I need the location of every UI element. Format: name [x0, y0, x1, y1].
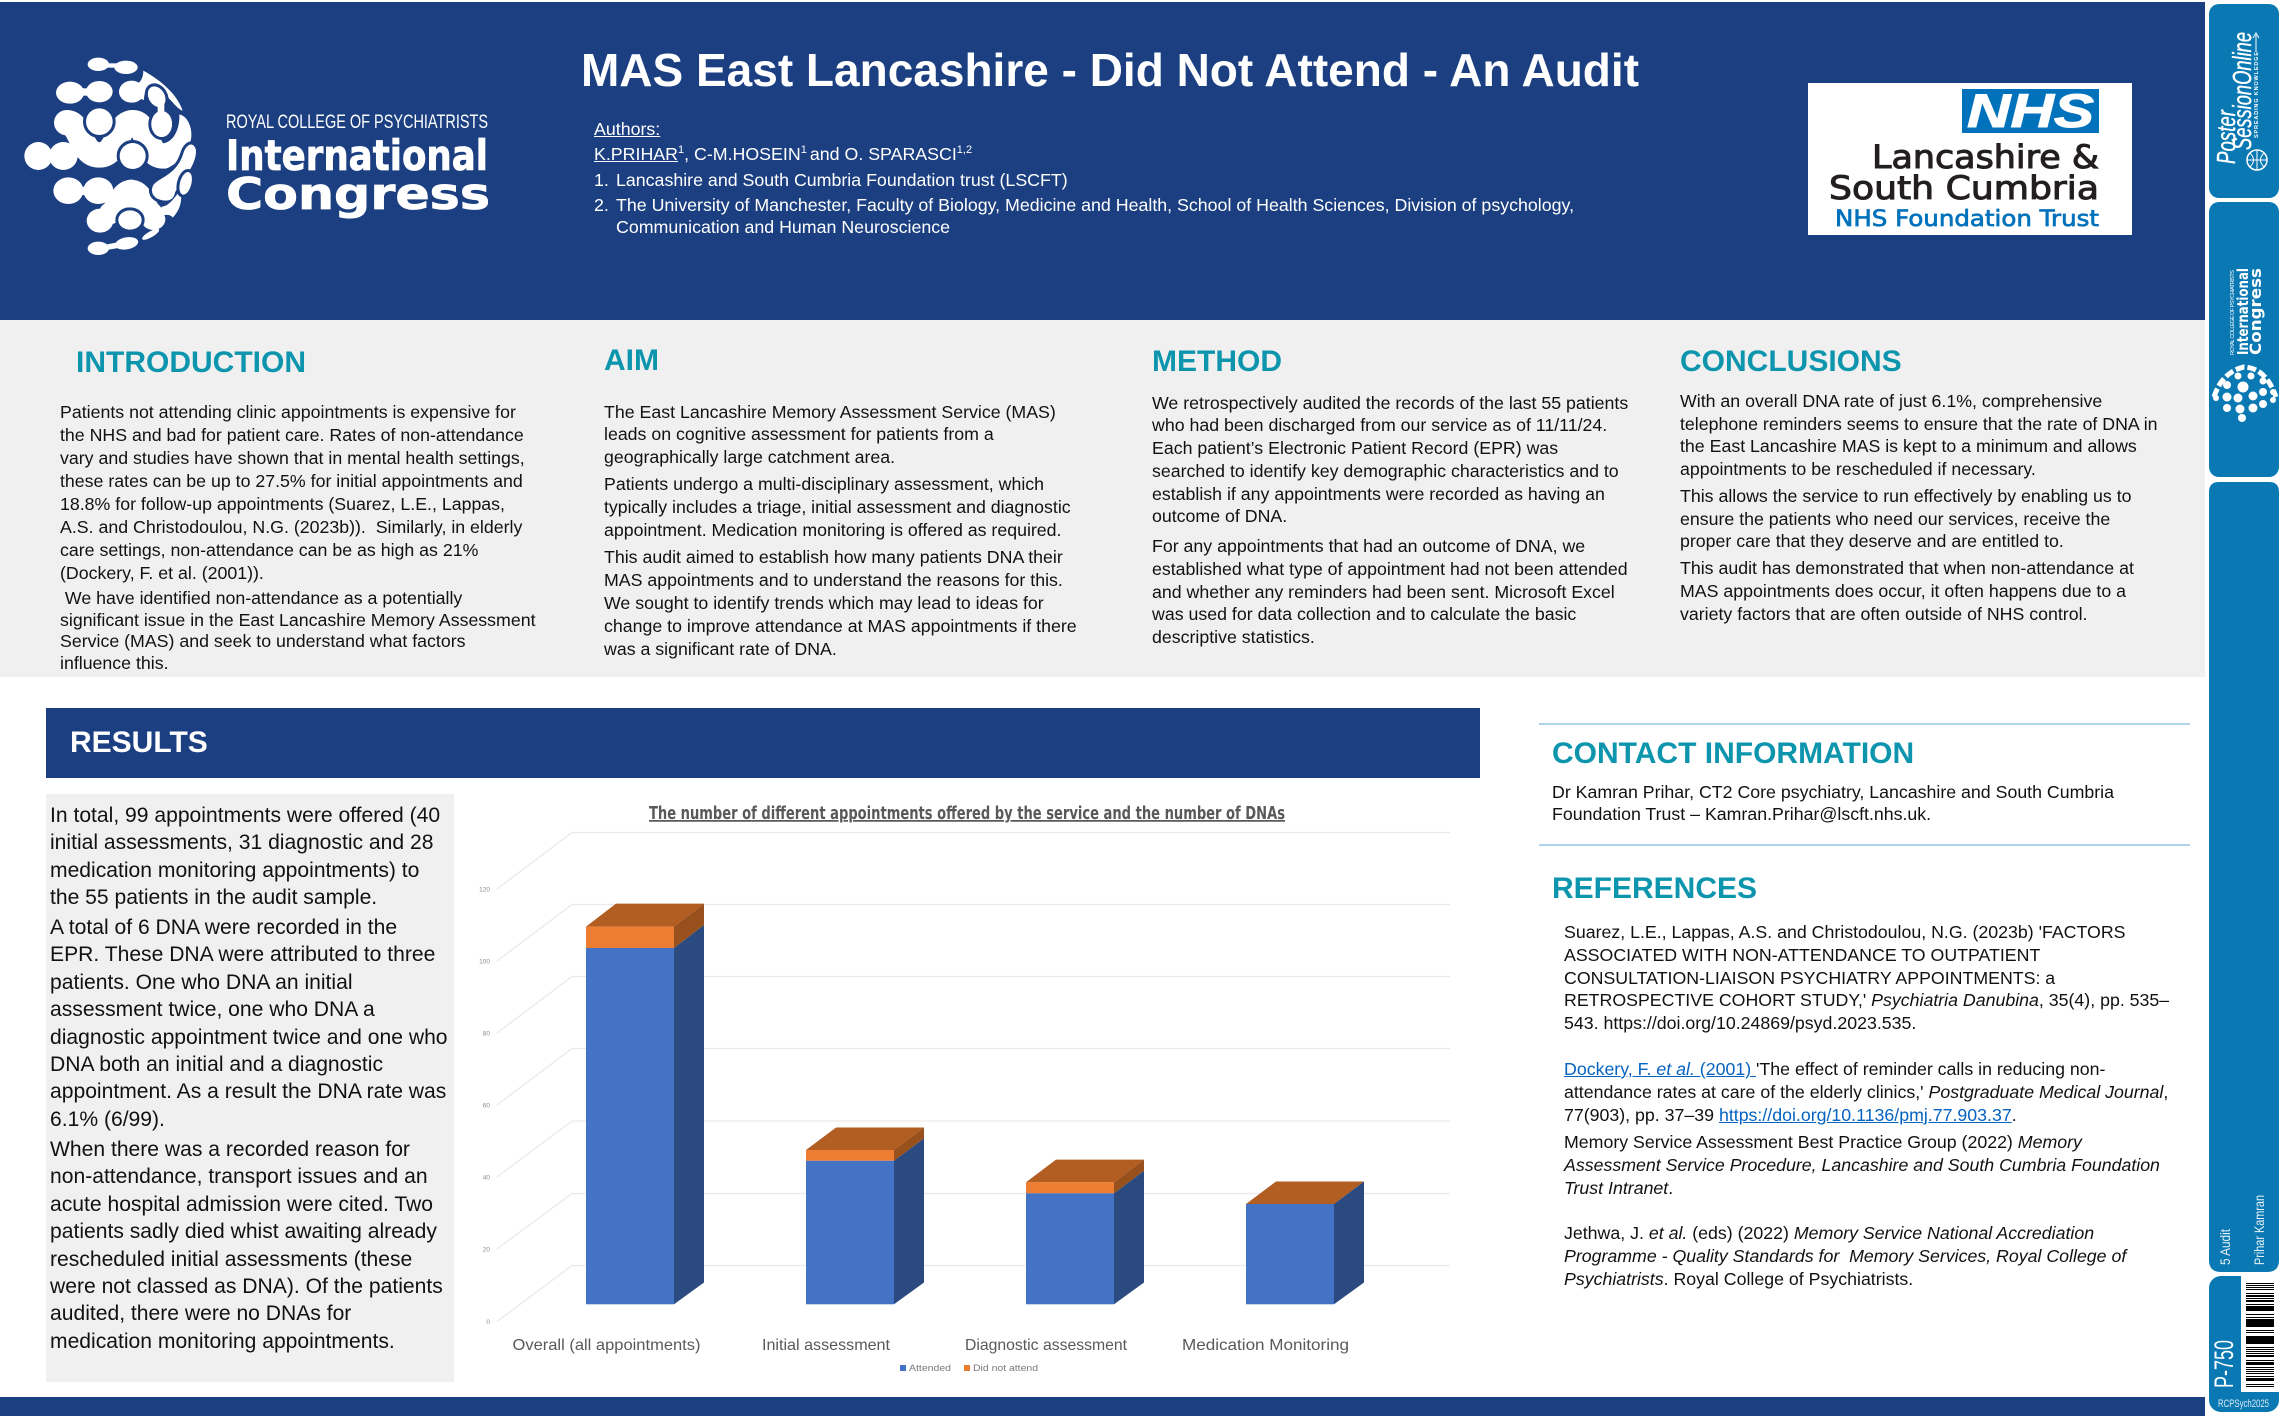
method paragraph 1: We retrospectively audited the records of the last 55 patients — [1152, 392, 1628, 412]
panel: aim — [604, 344, 1077, 659]
aim paragraph 3: We sought to identify trends which may lead to ideas for — [604, 593, 1044, 613]
reference: Jethwa — [1564, 1223, 2128, 1289]
author names: K.PRIHAR1, C-M.HOSEIN1 and O. SPARASCI1,2 — [594, 144, 972, 164]
method paragraph 2: and whether any reminders had been sent. Microsoft Excel — [1152, 582, 1615, 602]
method paragraph 1: outcome of DNA. — [1152, 506, 1287, 526]
sidebar tab: poster number and barcode: P-750 — [2209, 1340, 2239, 1388]
reference: Suarez: Suarez, L.E., Lappas, A.S. and Christodoulou, N.G. (2023b) 'FACTORS — [1564, 922, 2126, 942]
sidebar tab: poster details: 5 Audit — [2217, 1229, 2233, 1265]
grey band: introductory sections — [0, 320, 2205, 677]
results paragraph 2: 6.1% (6/99). — [50, 1108, 165, 1131]
conclusions paragraph 2: This allows the service to run effectively by enabling us to — [1680, 486, 2132, 506]
sidebar tab: International Congress — [2209, 202, 2279, 477]
category labels: Initial assessment — [762, 1337, 891, 1354]
aim paragraph 3: This audit aimed to establish how many patients DNA their — [604, 547, 1063, 567]
logo: Royal College of Psychiatrists International Congress: Congress — [226, 169, 490, 220]
reference: Memory Service Assessment: Memory Service Assessment Best Practice Group (2022) Memory — [1564, 1132, 2082, 1152]
conclusions paragraph 1 — [1680, 391, 2158, 479]
category labels: Diagnostic assessment — [965, 1337, 1128, 1354]
method paragraph 2: For any appointments that had an outcome of DNA, we — [1152, 536, 1585, 556]
contact details: Foundation Trust – Kamran.Prihar@lscft.nhs.uk. — [1552, 804, 1931, 824]
legend: Attended — [909, 1363, 951, 1374]
aim paragraph 2: appointment. Medication monitoring is offered as required. — [604, 520, 1062, 540]
results paragraph 2: appointment. As a result the DNA rate was — [50, 1080, 446, 1103]
y axis labels: 60 — [483, 1102, 490, 1110]
results paragraph 2 — [50, 916, 448, 1131]
results paragraph 1: the 55 patients in the audit sample. — [50, 886, 377, 909]
title: MAS East Lancashire - Did Not Attend - An Audit — [581, 44, 1639, 96]
bar: medication monitoring — [1246, 1182, 1364, 1304]
reference: Suarez: 543. https://doi.org/10.24869/psyd.2023.535. — [1564, 1013, 1916, 1033]
method paragraph 1: Each patient’s Electronic Patient Record (EPR) was — [1152, 438, 1558, 458]
conclusions paragraph 1: telephone reminders seems to ensure that the rate of DNA in — [1680, 414, 2158, 434]
introduction paragraph 1: Patients not attending clinic appointments is expensive for — [60, 402, 516, 422]
reference: Suarez: CONSULTATION-LIAISON PSYCHIATRY APPOINTMENTS: a — [1564, 968, 2055, 988]
introduction paragraph 2: significant issue in the East Lancashire Memory Assessment — [60, 610, 536, 630]
affiliation 1: Lancashire and South Cumbria Foundation trust (LSCFT) — [616, 170, 1068, 190]
heading: contact information: CONTACT INFORMATION — [1552, 737, 1914, 770]
aim paragraph 1: geographically large catchment area. — [604, 447, 895, 467]
sidebar tab: poster number and barcode — [2209, 1276, 2279, 1412]
results paragraph 3: When there was a recorded reason for — [50, 1138, 410, 1161]
reference: Suarez: RETROSPECTIVE COHORT STUDY,' Psychiatria Danubina, 35(4), pp. 535– — [1564, 990, 2169, 1010]
contact details: Dr Kamran Prihar, CT2 Core psychiatry, Lancashire and South Cumbria — [1552, 782, 2114, 802]
reference: Jethwa: Psychiatrists. Royal College of Psychiatrists. — [1564, 1269, 1913, 1289]
reference: Dockery — [1564, 1059, 2168, 1125]
conclusions paragraph 2: ensure the patients who need our services, receive the — [1680, 509, 2110, 529]
panel: references — [1552, 872, 2170, 1289]
aim paragraph 1 — [604, 402, 1056, 467]
method paragraph 2 — [1152, 536, 1628, 647]
heading: introduction: INTRODUCTION — [76, 346, 306, 379]
affiliation 1: 1. — [594, 170, 609, 190]
sidebar tab: poster details: Prihar Kamran — [2251, 1195, 2267, 1265]
conclusions paragraph 3: This audit has demonstrated that when non-attendance at — [1680, 558, 2134, 578]
bar: diagnostic assessment — [1026, 1160, 1144, 1304]
conclusions paragraph 2: proper care that they deserve and are entitled to. — [1680, 531, 2064, 551]
affiliation 2: The University of Manchester, Faculty of Biology, Medicine and Health, School of Health Sciences, Division of psychology, — [616, 195, 1574, 215]
y axis labels — [479, 886, 490, 1326]
panel: contact information — [1539, 723, 2190, 846]
aim paragraph 3 — [604, 547, 1077, 659]
results paragraph 1: In total, 99 appointments were offered (40 — [50, 804, 440, 827]
introduction paragraph 1: the NHS and bad for patient care. Rates of non-attendance — [60, 424, 524, 444]
reference: Memory Service Assessment: Assessment Service Procedure, Lancashire and South Cumbria Foundation — [1564, 1155, 2160, 1175]
aim paragraph 2: typically includes a triage, initial assessment and diagnostic — [604, 497, 1071, 517]
heading: aim: AIM — [604, 344, 659, 377]
aim paragraph 3: was a significant rate of DNA. — [604, 639, 837, 659]
results paragraph 3: were not classed as DNA). Of the patients — [50, 1275, 443, 1298]
introduction paragraph 1: 18.8% for follow-up appointments (Suarez, L.E., Lappas, — [60, 494, 505, 514]
method paragraph 2: descriptive statistics. — [1152, 627, 1315, 647]
bar: initial assessment — [806, 1128, 924, 1304]
NHS logo: South Cumbria — [1829, 169, 2099, 207]
results heading bar: RESULTS — [70, 726, 208, 759]
heading: references: REFERENCES — [1552, 872, 1757, 905]
sidebar tab: International Congress: Congress — [2246, 268, 2265, 355]
introduction paragraph 1: these rates can be up to 27.5% for initial appointments and — [60, 470, 523, 490]
sidebar tab: International Congress: ROYAL COLLEGE OF PSYCHIATRISTS — [2230, 270, 2236, 355]
sidebar tab: poster details — [2209, 482, 2279, 1272]
reference: Dockery: attendance rates at care of the elderly clinics,' Postgraduate Medical Journal, — [1564, 1082, 2168, 1102]
reference: Jethwa: Programme - Quality Standards for Memory Services, Royal College of — [1564, 1246, 2126, 1266]
y axis labels: 100 — [479, 958, 490, 966]
reference: Dockery: 77(903), pp. 37–39 https://doi.org/10.1136/pmj.77.903.37. — [1564, 1105, 2017, 1125]
y axis labels: 0 — [486, 1319, 490, 1326]
reference: Jethwa: Jethwa, J. et al. (eds) (2022) Memory Service National Accrediation — [1564, 1223, 2094, 1243]
method paragraph 1: searched to identify key demographic characteristics and to — [1152, 461, 1619, 481]
legend: Did not attend — [973, 1363, 1038, 1374]
results paragraph 2: DNA both an initial and a diagnostic — [50, 1053, 383, 1076]
bar: overall — [586, 904, 704, 1304]
NHS logo — [1808, 83, 2132, 235]
method paragraph 1: establish if any appointments were recorded as having an — [1152, 484, 1605, 504]
y axis labels: 80 — [483, 1030, 490, 1038]
results paragraph 3: medication monitoring appointments. — [50, 1330, 395, 1353]
NHS logo: Lancashire & — [1872, 138, 2099, 176]
results paragraph 2: EPR. These DNA were attributed to three — [50, 943, 435, 966]
method paragraph 1 — [1152, 392, 1628, 526]
affiliation 2 — [594, 195, 1574, 237]
introduction paragraph 2: We have identified non-attendance as a potentially — [65, 588, 462, 608]
heading: conclusions: CONCLUSIONS — [1680, 345, 1902, 378]
method paragraph 2: established what type of appointment had not been attended — [1152, 559, 1628, 579]
introduction paragraph 2: Service (MAS) and seek to understand what factors — [60, 631, 466, 651]
sidebar tab: Poster Session Online — [2209, 4, 2279, 198]
results paragraph 3: non-attendance, transport issues and an — [50, 1165, 428, 1188]
bottom bar — [0, 1397, 2205, 1416]
panel: conclusions — [1680, 345, 2158, 624]
results paragraph 3 — [50, 1138, 443, 1353]
results paragraph 1 — [50, 804, 440, 909]
conclusions paragraph 1: appointments to be rescheduled if necessary. — [1680, 459, 2036, 479]
results paragraph 1: initial assessments, 31 diagnostic and 28 — [50, 831, 433, 854]
y axis labels: 120 — [479, 886, 490, 894]
results heading bar — [46, 708, 1480, 778]
affiliation 2: 2. — [594, 195, 609, 215]
results paragraph 3: rescheduled initial assessments (these — [50, 1248, 412, 1271]
header banner — [0, 2, 2205, 320]
method paragraph 1: who had been discharged from our service as of 11/11/24. — [1152, 415, 1607, 435]
bar chart: appointments offered and DNAs — [479, 804, 1450, 1374]
aim paragraph 2 — [604, 474, 1071, 540]
results paragraph 3: patients sadly died whist awaiting already — [50, 1220, 437, 1243]
introduction paragraph 2: influence this. — [60, 652, 169, 672]
reference: Memory Service Assessment: Trust Intranet. — [1564, 1178, 1673, 1198]
results paragraph 2: patients. One who DNA an initial — [50, 971, 353, 994]
introduction paragraph 2 — [60, 588, 536, 672]
results paragraph 2: assessment twice, one who DNA a — [50, 998, 375, 1021]
aim paragraph 3: change to improve attendance at MAS appointments if there — [604, 616, 1077, 636]
conclusions paragraph 3: variety factors that are often outside of NHS control. — [1680, 604, 2087, 624]
conclusions paragraph 1: the East Lancashire MAS is kept to a minimum and allows — [1680, 436, 2137, 456]
right sidebar — [2209, 4, 2279, 1412]
contact details — [1552, 782, 2114, 824]
category labels — [512, 1337, 1349, 1354]
results paragraph 2: A total of 6 DNA were recorded in the — [50, 916, 397, 939]
authors label: Authors: — [594, 119, 660, 139]
legend — [900, 1363, 1038, 1374]
conclusions paragraph 2 — [1680, 486, 2132, 551]
aim paragraph 1: leads on cognitive assessment for patients from a — [604, 424, 994, 444]
introduction paragraph 1: vary and studies have shown that in mental health settings, — [60, 448, 525, 468]
results paragraph 2: diagnostic appointment twice and one who — [50, 1026, 448, 1049]
NHS logo: NHS — [1967, 84, 2094, 137]
introduction paragraph 1 — [60, 402, 525, 582]
results paragraph 3: acute hospital admission were cited. Two — [50, 1193, 433, 1216]
reference: Memory Service Assessment — [1563, 1132, 2160, 1198]
y axis labels: 40 — [483, 1174, 490, 1182]
introduction paragraph 1: (Dockery, F. et al. (2001)). — [60, 562, 264, 582]
panel: method — [1152, 345, 1628, 647]
category labels: Overall (all appointments) — [512, 1337, 700, 1354]
conclusions paragraph 3: MAS appointments does occur, it often happens due to a — [1680, 581, 2126, 601]
introduction paragraph 1: care settings, non-attendance can be as high as 21% — [60, 540, 478, 560]
category labels: Medication Monitoring — [1182, 1337, 1349, 1354]
sidebar tab: Poster Session Online: Poster — [2211, 109, 2241, 164]
panel: results text — [46, 794, 454, 1382]
conclusions paragraph 3 — [1680, 558, 2134, 624]
NHS logo: NHS Foundation Trust — [1835, 207, 2099, 232]
y axis labels: 20 — [483, 1246, 490, 1254]
aim paragraph 3: MAS appointments and to understand the reasons for this. — [604, 570, 1063, 590]
aim paragraph 1: The East Lancashire Memory Assessment Service (MAS) — [604, 402, 1056, 422]
method paragraph 2: was used for data collection and to calculate the basic — [1152, 604, 1576, 624]
results paragraph 1: medication monitoring appointments) to — [50, 859, 419, 882]
introduction paragraph 1: A.S. and Christodoulou, N.G. (2023b)). Similarly, in elderly — [60, 516, 522, 536]
results paragraph 3: audited, there were no DNAs for — [50, 1302, 351, 1325]
panel: introduction — [60, 346, 536, 672]
heading: method: METHOD — [1152, 345, 1282, 378]
affiliation 2: Communication and Human Neuroscience — [616, 217, 950, 237]
reference: Dockery: Dockery, F. et al. (2001) 'The effect of reminder calls in reducing non- — [1564, 1059, 2105, 1079]
sidebar tab: International Congress: International — [2234, 268, 2252, 355]
authors and affiliations — [594, 119, 1574, 237]
sidebar tab: Poster Session Online: SPREADING KNOWLEDGE — [2254, 52, 2260, 138]
reference: Suarez — [1564, 922, 2170, 1033]
aim paragraph 2: Patients undergo a multi-disciplinary assessment, which — [604, 474, 1044, 494]
conclusions paragraph 1: With an overall DNA rate of just 6.1%, comprehensive — [1680, 391, 2102, 411]
logo: Royal College of Psychiatrists International Congress — [24, 58, 490, 255]
reference: Suarez: ASSOCIATED WITH NON-ATTENDANCE TO OUTPATIENT — [1564, 945, 2040, 965]
